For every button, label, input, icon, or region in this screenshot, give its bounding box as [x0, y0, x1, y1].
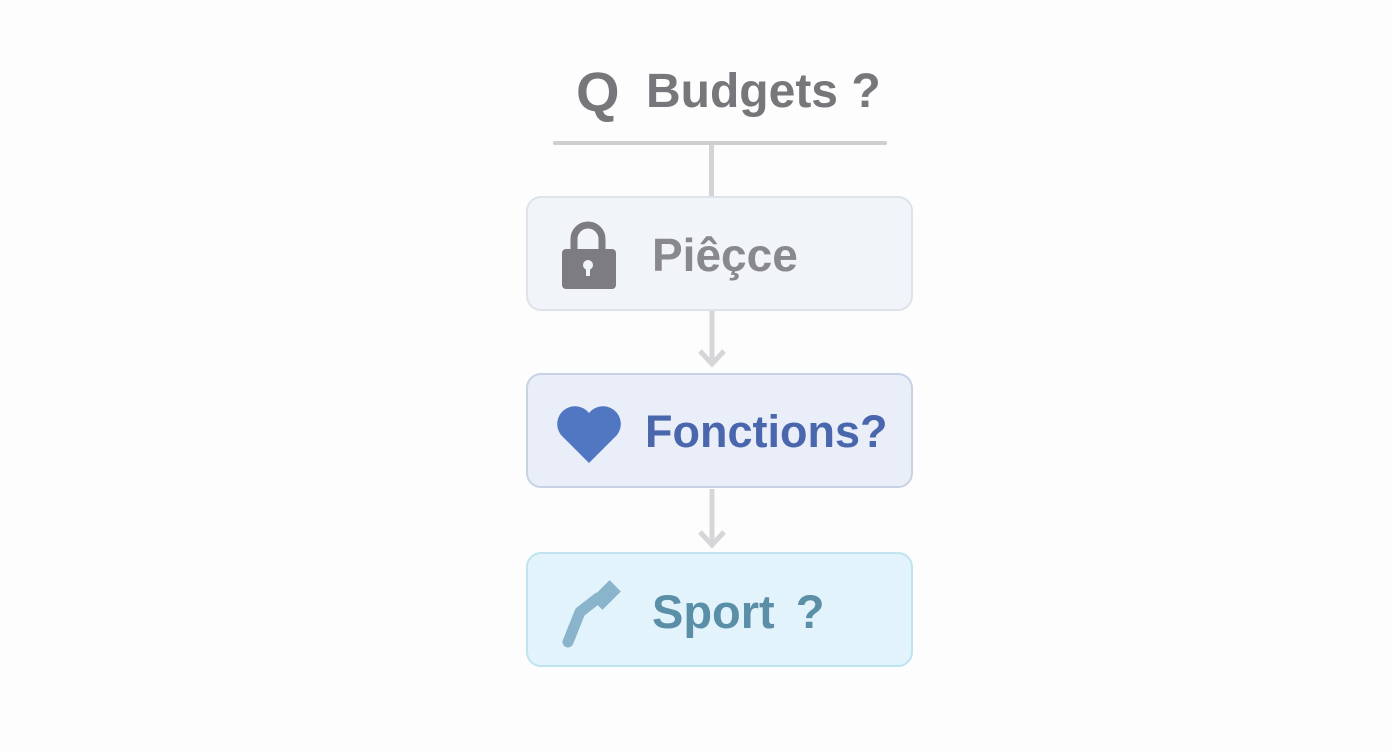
text: Fonctions?: Fonctions?	[645, 406, 887, 457]
arrow 1	[698, 311, 726, 368]
text: Piêçce: Piêçce	[652, 229, 798, 281]
icon: search Q: Q	[576, 60, 620, 123]
panel: Sport	[526, 552, 913, 667]
connector: title to Pièce	[709, 145, 714, 197]
panel: Fonctions	[526, 373, 913, 488]
icon: sport tool	[562, 580, 621, 648]
panel: Pièce	[526, 196, 913, 311]
title text: Budgets ?	[646, 65, 881, 118]
icon: lock	[562, 222, 616, 289]
title	[576, 60, 881, 123]
arrow 2	[698, 489, 726, 548]
icon: heart	[557, 406, 621, 463]
text: Sport ?: Sport ?	[652, 585, 824, 638]
divider line	[553, 141, 887, 145]
